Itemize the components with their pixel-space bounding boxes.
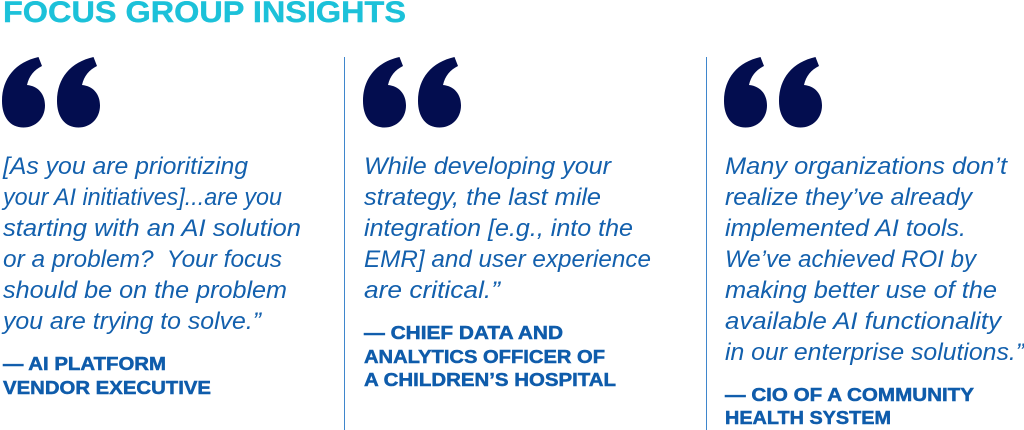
attribution 2: ANALYTICS OFFICER OF — [364, 346, 605, 367]
quote text 2: strategy, the last mile — [364, 184, 601, 211]
quote text 2: While developing your — [364, 153, 612, 180]
quote text 1: or a problem? Your focus — [3, 246, 282, 273]
quote text 3: making better use of the — [725, 277, 997, 304]
icon: quotation mark 1 — [2, 57, 100, 128]
quote text 2 — [364, 153, 651, 304]
icon: quotation mark 3 — [724, 57, 822, 128]
quote text 1 — [1, 153, 301, 335]
quote text 1: starting with an AI solution — [3, 215, 301, 242]
icon: quotation mark 2 — [363, 57, 461, 128]
quote text 1: should be on the problem — [3, 277, 287, 304]
attribution 2: A CHILDREN’S HOSPITAL — [364, 369, 616, 390]
quote text 1: [As you are prioritizing — [2, 153, 249, 180]
quote text 2: integration [e.g., into the — [364, 215, 633, 242]
attribution 3: — CIO OF A COMMUNITY — [725, 384, 975, 405]
quote text 3: in our enterprise solutions.” — [725, 339, 1024, 366]
attribution 2: — CHIEF DATA AND — [364, 322, 563, 343]
panel: quote 3 — [724, 57, 1024, 428]
attribution 3 — [725, 384, 975, 428]
quote text 3: realize they’ve already — [725, 184, 974, 211]
panel: quote 1 — [1, 57, 301, 398]
quote text 1: you are trying to solve.” — [1, 308, 262, 335]
quote text 3: We’ve achieved ROI by — [725, 246, 978, 273]
quote text 3: implemented AI tools. — [725, 215, 966, 242]
attribution 2 — [364, 322, 616, 390]
quote text 3: available AI functionality — [725, 308, 1003, 335]
attribution 3: HEALTH SYSTEM — [725, 407, 891, 428]
quote text 3 — [725, 153, 1024, 366]
attribution 1 — [3, 353, 211, 398]
quote text 3: Many organizations don’t — [725, 153, 1008, 180]
attribution 1: — AI PLATFORM — [3, 353, 166, 374]
panel: quote 2 — [363, 57, 651, 390]
quote text 2: are critical.” — [364, 277, 501, 304]
attribution 1: VENDOR EXECUTIVE — [3, 377, 211, 398]
quote text 1: your AI initiatives]...are you — [1, 184, 282, 211]
quote text 2: EMR] and user experience — [364, 246, 651, 273]
